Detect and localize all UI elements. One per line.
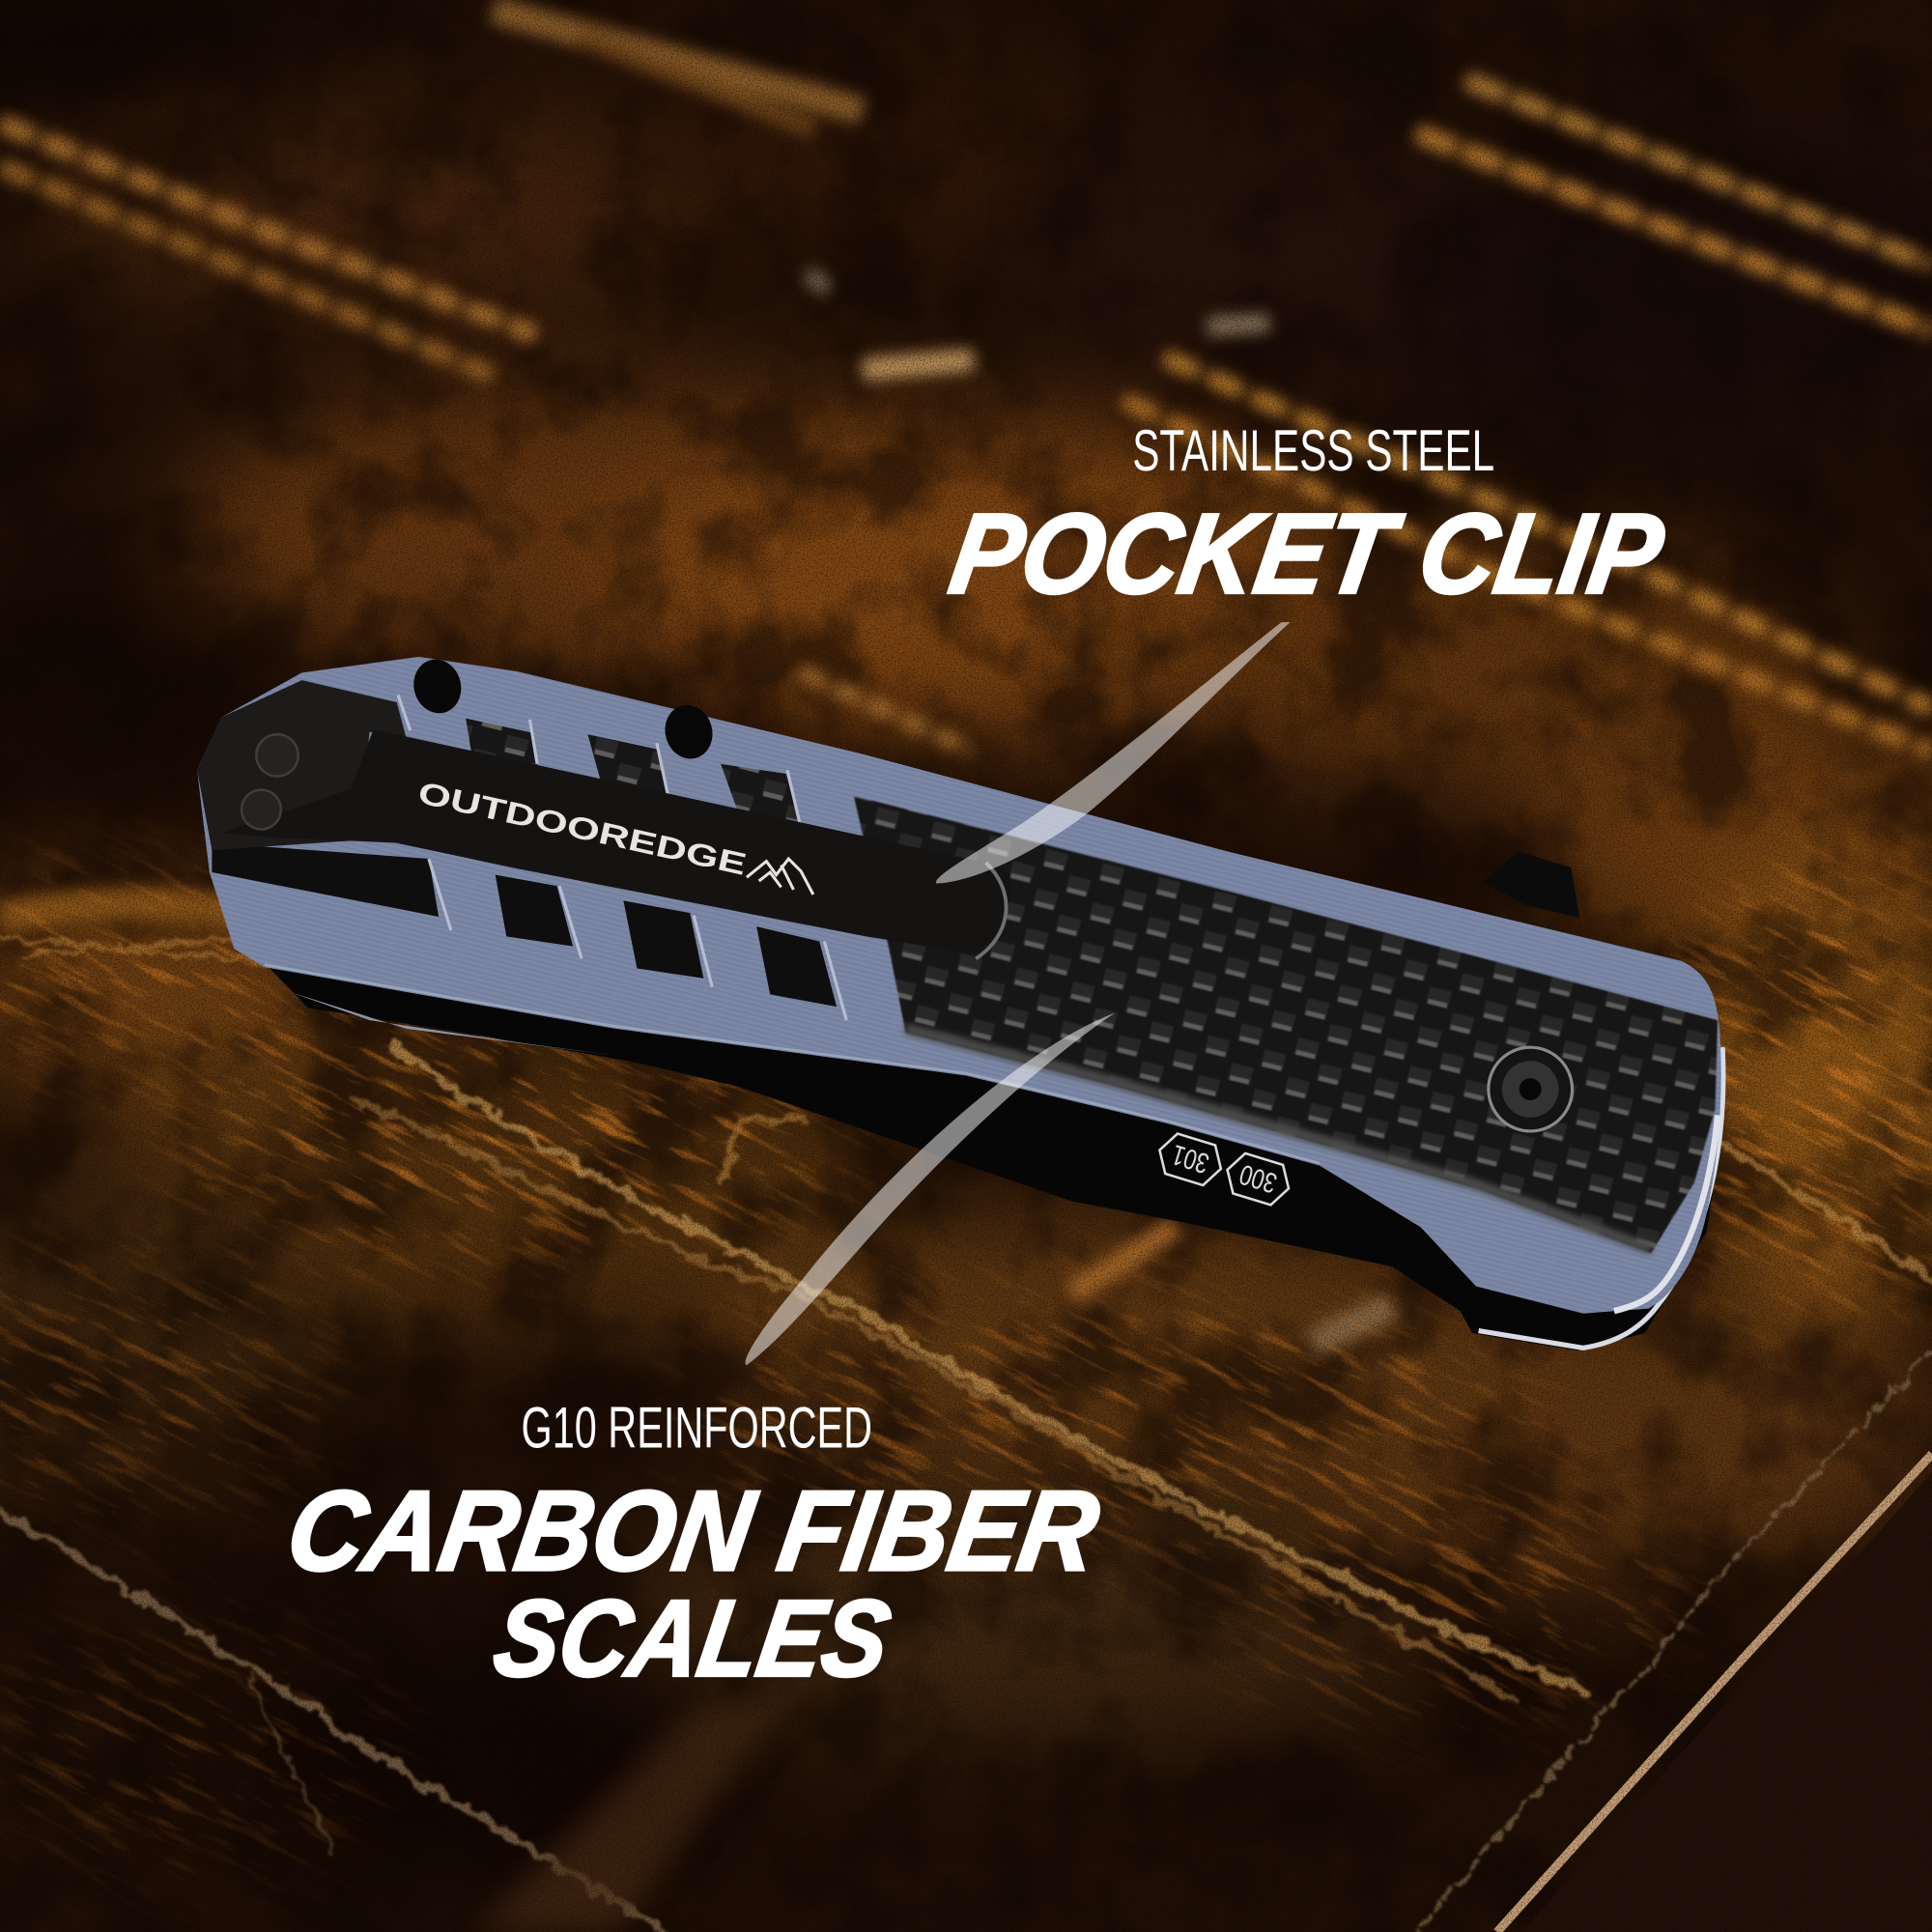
bright scratches in lower leather xyxy=(0,936,1932,1932)
carbon windows, upper row xyxy=(466,719,804,838)
blade highlight xyxy=(290,992,629,1057)
carbon fiber inlay xyxy=(854,796,1718,1253)
leather stitching, out of focus xyxy=(0,10,1932,1343)
steel stamp 300 xyxy=(1221,1150,1294,1208)
heading: carbon fiber: CARBON FIBER xyxy=(279,1468,1107,1595)
pocket clip xyxy=(222,729,1010,953)
right edge highlight xyxy=(1614,1115,1718,1311)
arrow: pointer to carbon fiber scales xyxy=(746,1012,1115,1365)
handle screws xyxy=(408,654,719,764)
clip curved tip xyxy=(976,863,1007,958)
thumb stud xyxy=(1482,851,1579,918)
dark panel under leather edge xyxy=(1521,1472,1932,1932)
heading: pocket clip: POCKET CLIP xyxy=(942,491,1671,617)
soft edge on carbon xyxy=(906,1029,1651,1249)
leather strap shape, lower middle xyxy=(474,1688,801,1932)
clip anchor screws xyxy=(242,734,298,829)
arrow: pointer to pocket clip xyxy=(936,622,1290,884)
pivot screw xyxy=(1489,1047,1573,1131)
steel stamp 301 xyxy=(1153,1130,1227,1189)
icon: mountain logo xyxy=(747,859,813,895)
knife xyxy=(197,654,1725,1350)
blade and liner under the handle xyxy=(265,963,1725,1350)
heading: scales: SCALES xyxy=(487,1577,897,1699)
butt end dark carbon xyxy=(197,680,407,850)
steel stamp 301: 301 xyxy=(1168,1138,1212,1179)
callout: pocket clip xyxy=(942,418,1671,617)
subheading: G10 reinforced: G10 REINFORCED xyxy=(522,1396,872,1461)
clip text: OUTDOOREDGE xyxy=(415,775,750,882)
highlight along lower handle edge xyxy=(265,965,1320,1163)
handle scale G10 xyxy=(197,657,1721,1314)
subheading: stainless steel: STAINLESS STEEL xyxy=(1132,418,1494,483)
light bevels on gray bars xyxy=(398,695,846,1020)
handle white liner edge xyxy=(1479,1047,1723,1348)
callout: carbon fiber scales xyxy=(279,1396,1107,1699)
steel stamp 300: 300 xyxy=(1236,1158,1281,1199)
carbon windows, lower row xyxy=(496,875,837,1007)
scratched leather texture xyxy=(0,838,1932,1886)
